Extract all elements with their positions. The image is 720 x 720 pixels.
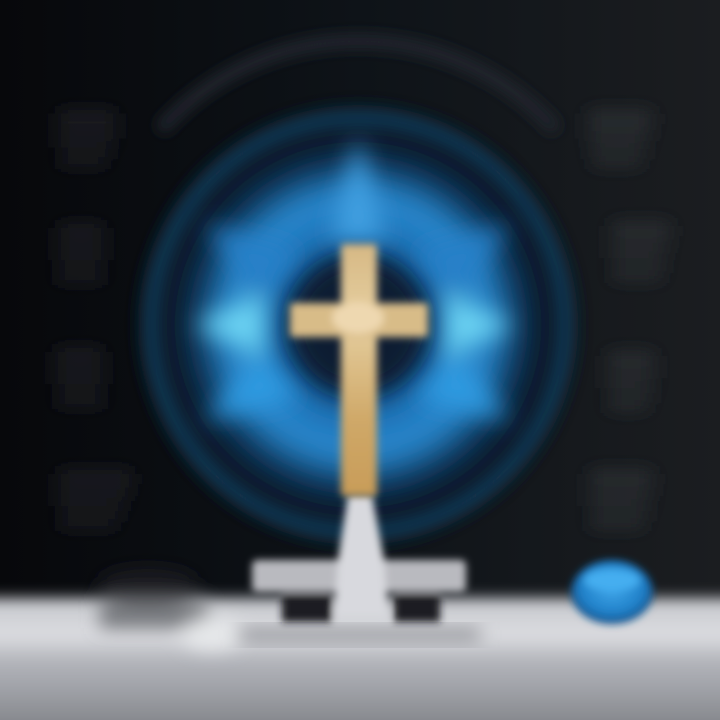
ray: lower right [415,350,510,420]
outer faint arc [160,41,556,130]
ray: lower left [205,350,300,420]
burst rays [195,135,512,420]
blue sphere on floor [571,560,653,624]
ray: top [330,135,386,240]
cross [290,244,428,496]
ray: right [445,290,512,360]
shadow band on floor [240,628,480,642]
cross stand base [252,495,466,622]
dark centre behind cross [292,259,424,391]
side text block placeholders right [588,112,670,526]
side text block placeholders left [55,112,132,526]
blue burst [193,160,523,490]
cross highlight [332,302,384,334]
floor [0,598,720,720]
ray: upper left [205,225,300,300]
cross horizontal beam [290,303,428,337]
cross vertical beam [341,244,377,496]
ray: upper right [415,225,510,300]
ray: left [195,290,265,360]
dark device left on floor [98,569,242,650]
blue halo rings [130,97,586,553]
